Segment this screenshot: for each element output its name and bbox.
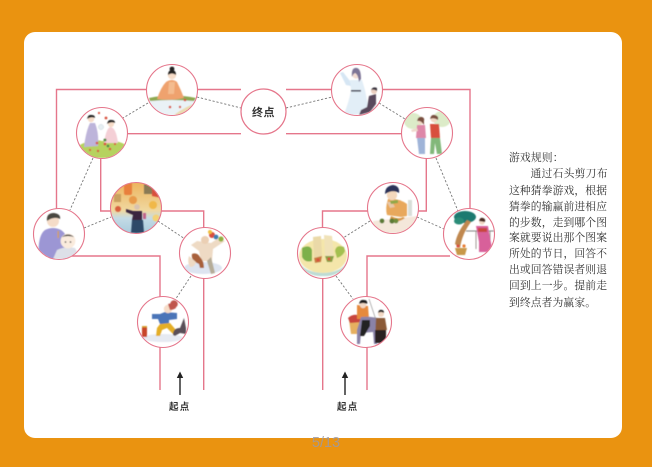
page number: 5/13 [312,435,340,451]
rules text block: 的步数，走到哪个图 [509,215,607,229]
start marker right [337,372,358,413]
circle: two women among flowers [76,108,128,158]
rules text block: 通过石头剪刀布 [530,166,608,180]
rules text block: 这种猜拳游戏，根据 [509,183,607,197]
rules text block: 回到上一步。提前走 [509,278,607,292]
circle: two girls outdoors [402,108,452,158]
circle: spring rolls on plate [298,228,348,278]
end circle [241,89,286,134]
white content panel [24,32,622,438]
rules text block: 出或回答错误者则退 [509,262,607,276]
rules text block: 猜拳的输赢前进相应 [509,199,607,213]
rules text block: 游戏规则： [509,150,564,164]
rules text block [509,150,608,309]
start marker left: 起点 [169,401,190,413]
start marker right: 起点 [337,401,358,413]
circle: man viewing lanterns [110,182,162,234]
rules text block: 所处的节日，回答不 [509,246,607,260]
circle: white-robed figure and kneeling man [332,64,382,116]
rules text block: 案就要说出那个图案 [509,230,607,244]
end circle: 终点 [252,105,275,119]
circle: woman on donkey with boy [340,296,392,348]
rules text block: 到终点者为赢家。 [509,295,596,309]
circle: boy and dumplings on table [368,182,418,234]
circle: mother combing child [34,208,84,260]
board path: red route lines [56,90,470,390]
circle: man with dog and lion mask [180,228,230,278]
dotted step connectors [70,97,458,300]
circle: child lighting firecracker [138,296,188,348]
circle: woman floating petals on a stream [146,64,198,116]
start marker left [169,372,190,413]
circle: swing under a tree [444,208,494,260]
